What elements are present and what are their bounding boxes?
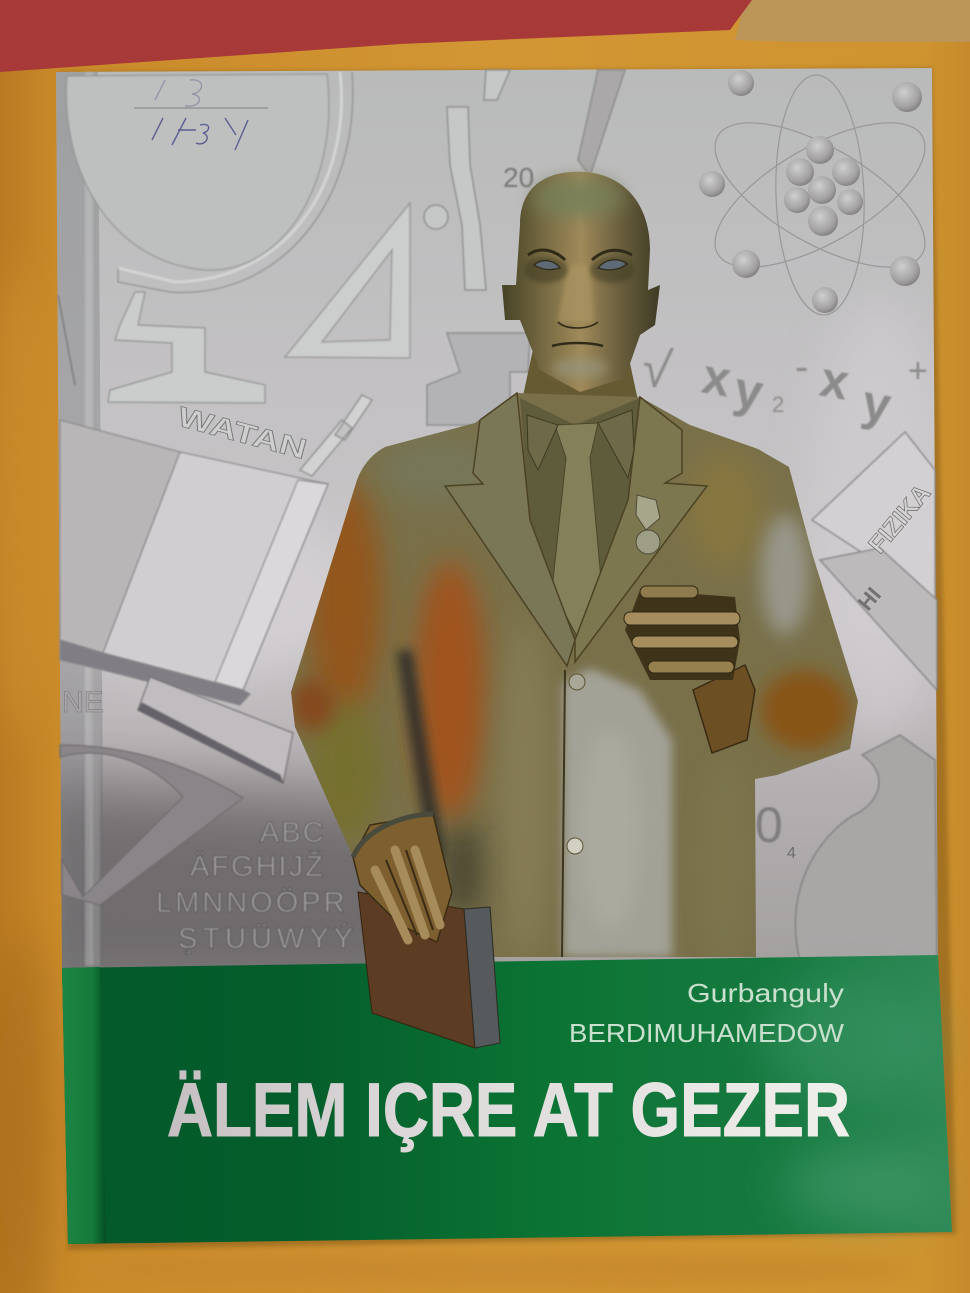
relief: FIZIKA lettering: FIZIKA xyxy=(863,479,936,559)
handwritten mark xyxy=(134,80,268,150)
suit buttons xyxy=(567,674,585,854)
right hand on chest xyxy=(624,586,740,680)
green spine xyxy=(62,967,106,1244)
atom spheres xyxy=(699,70,922,313)
relief: alphabet: ABC xyxy=(260,817,326,849)
relief: formula: √ xyxy=(638,339,675,401)
relief: alphabet: ÄFGHIJŽ xyxy=(190,850,325,883)
relief: formula: x xyxy=(816,351,853,411)
relief: HI lettering: HI xyxy=(853,582,886,615)
panel: relief background xyxy=(30,68,950,1000)
relief: formula: - xyxy=(795,345,808,389)
relief: alphabet: ŞTUÜWYÝ xyxy=(178,922,358,955)
relief: compass and tools xyxy=(300,70,625,476)
relief: formula: 2 xyxy=(772,392,784,417)
relief: lower tools xyxy=(60,677,293,905)
relief: physics books xyxy=(812,432,937,690)
green sheen xyxy=(760,980,940,1220)
relief: WATAN lettering: WATAN xyxy=(174,401,310,465)
right cuff xyxy=(693,665,755,753)
book in hand xyxy=(358,892,500,1048)
left lapel xyxy=(445,393,575,666)
jacket colour patches xyxy=(290,440,850,960)
panel: green band xyxy=(62,955,952,1244)
head highlights xyxy=(524,178,634,378)
relief: subscript: 4 xyxy=(787,845,796,862)
relief: flask xyxy=(795,735,937,962)
medal xyxy=(636,495,660,554)
author first name: Gurbanguly xyxy=(687,978,844,1008)
title: ÄLEM IÇRE AT GEZER xyxy=(167,1068,850,1153)
relief: alphabet: LMNNOÖPR xyxy=(156,887,348,919)
relief: triangle xyxy=(285,203,410,358)
relief: formula xyxy=(503,162,928,434)
relief: globe xyxy=(58,72,353,403)
head xyxy=(502,172,660,392)
shirt xyxy=(520,398,640,640)
relief: formula: + xyxy=(908,352,928,390)
relief: open book xyxy=(60,420,328,705)
lower hand xyxy=(353,814,452,942)
collar xyxy=(527,410,634,478)
relief: formula: y xyxy=(858,374,895,434)
jacket xyxy=(280,385,880,965)
author surname: BERDIMUHAMEDOW xyxy=(569,1018,844,1048)
bronze statue xyxy=(280,172,880,1048)
right lapel xyxy=(575,397,707,662)
red carpet xyxy=(0,0,970,72)
relief: formula: 20 xyxy=(503,162,534,193)
neck xyxy=(520,340,640,410)
relief: alphabet xyxy=(156,817,358,955)
tie xyxy=(552,423,602,638)
relief: formula: y xyxy=(730,361,767,421)
relief: formula: x xyxy=(698,348,735,408)
relief: atom xyxy=(694,74,946,316)
relief: chemical formula: 0 xyxy=(755,797,783,853)
facial features xyxy=(528,250,632,346)
light jacket front xyxy=(563,668,672,957)
relief: NE lettering: NE xyxy=(62,686,104,719)
